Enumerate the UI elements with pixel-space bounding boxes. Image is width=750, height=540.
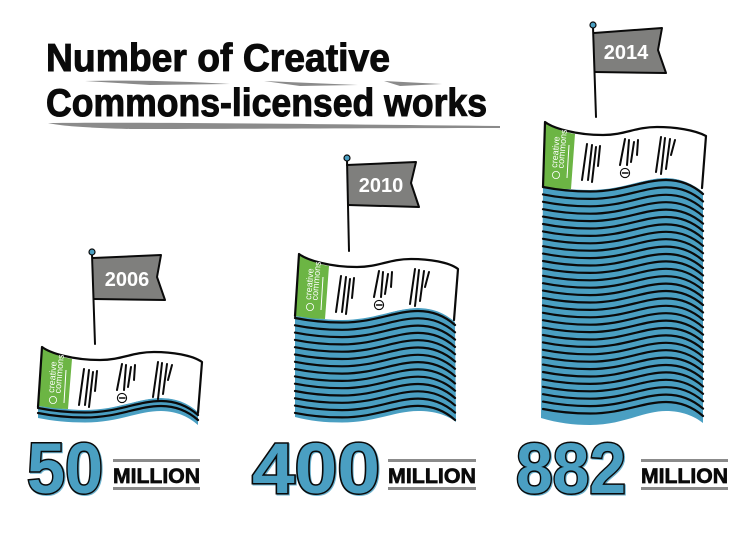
cc logo: creative (46, 361, 59, 393)
cc logo (46, 353, 66, 394)
flag 2014 (590, 22, 666, 117)
flag 2014: 2014 (604, 42, 649, 64)
blue sheets 2010 (295, 308, 456, 422)
banknote 2014 (543, 122, 706, 192)
count 882 million (516, 430, 728, 509)
title text: Number of Creative (46, 37, 390, 80)
flag 2006 (89, 249, 165, 344)
flag 2010: 2010 (359, 175, 403, 197)
flag 2010 (344, 155, 419, 251)
count 400 million: 400 (252, 430, 380, 509)
stack 2014 (516, 22, 728, 509)
title text (46, 37, 487, 125)
blue sheets 2014 (541, 178, 703, 425)
count 882 million: 882 (516, 430, 626, 509)
count 50 million (27, 430, 200, 509)
banknote 2006 (38, 347, 202, 413)
count 882 million: MILLION (641, 465, 728, 488)
cc logo (303, 260, 323, 301)
cc logo: creative (303, 268, 316, 300)
sheet lines 2010 (295, 311, 455, 420)
title brush underline (48, 81, 500, 129)
title (46, 37, 500, 129)
banknote 2010 (295, 254, 458, 320)
stack 2006 (27, 249, 202, 509)
blue sheet 2006 (38, 398, 198, 425)
sheet lines 2006 (38, 401, 198, 420)
title text: Commons-licensed works (46, 82, 487, 125)
cc logo (549, 128, 569, 169)
count 50 million: MILLION (113, 465, 200, 488)
count 50 million: 50 (27, 430, 103, 509)
count 400 million (252, 430, 476, 509)
cc logo: creative (549, 136, 562, 168)
cc logo: commons (310, 261, 323, 301)
cc logo: commons (556, 129, 569, 169)
count 400 million: MILLION (388, 465, 476, 488)
sheet lines 2014 (543, 180, 703, 416)
stack 2010 (252, 155, 476, 509)
cc logo: commons (53, 354, 66, 394)
flag 2006: 2006 (105, 269, 149, 291)
